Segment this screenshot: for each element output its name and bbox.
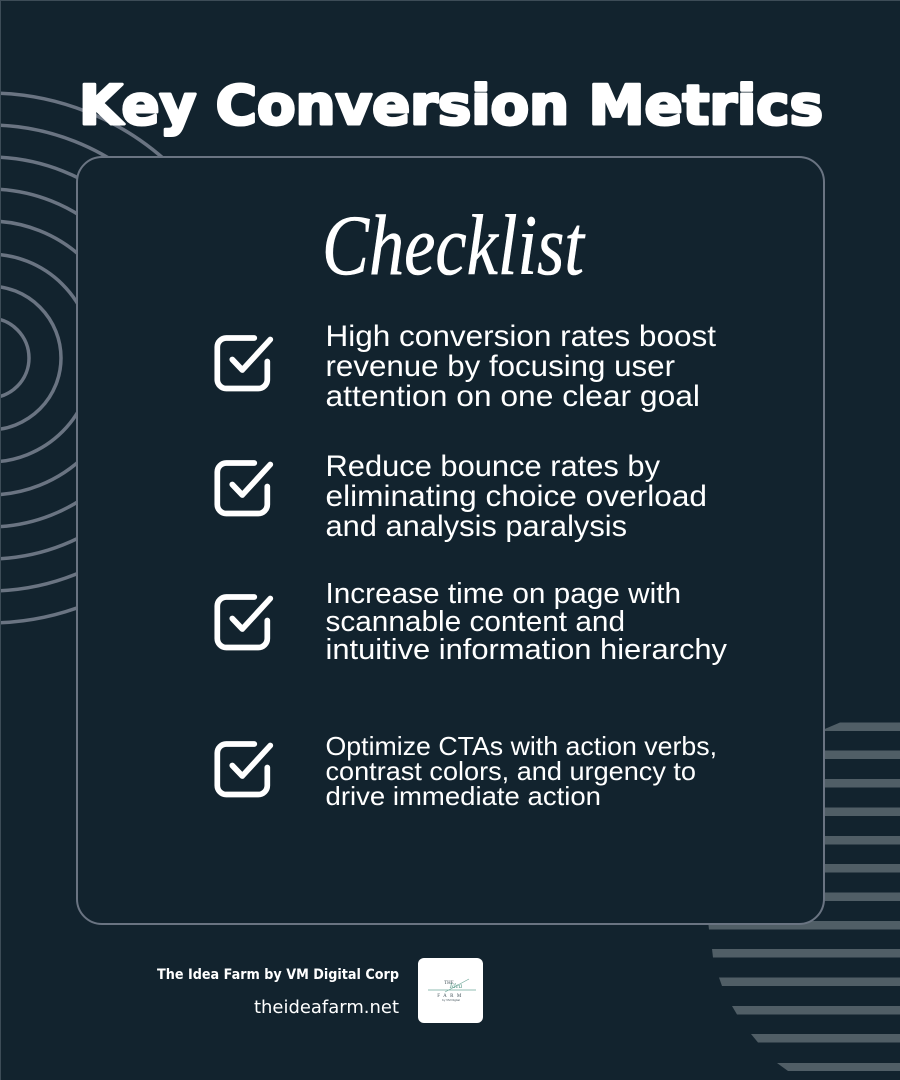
panel heading: Checklist (322, 197, 586, 293)
logo word: farm: FARM (437, 994, 465, 999)
text: time on page: Increase time on page with (326, 578, 681, 610)
footer website: theideafarm.net (254, 997, 399, 1018)
text: CTAs: contrast colors, and urgency to (326, 756, 696, 786)
text: bounce rates (326, 450, 707, 543)
text: time on page: scannable content and (326, 606, 625, 638)
panel: checklist (77, 157, 824, 924)
text: bounce rates: eliminating choice overload (326, 480, 707, 513)
checklist item 2 (217, 450, 707, 543)
logo (418, 958, 483, 1023)
text: conversion rates: attention on one clear goal (326, 380, 700, 413)
checklist item 1 (217, 320, 717, 413)
logo word: by line: by VM Digital (442, 998, 460, 1002)
icon: checkbox (217, 463, 270, 514)
text: conversion rates: revenue by focusing user (326, 350, 675, 383)
decorative concentric rings (0, 93, 254, 623)
panel background (77, 157, 824, 924)
text: bounce rates: Reduce bounce rates by (326, 450, 660, 483)
text: CTAs: drive immediate action (326, 781, 601, 811)
text: conversion rates: High conversion rates boost (326, 320, 717, 353)
checklist item 4 (217, 731, 717, 811)
text: CTAs: Optimize CTAs with action verbs, (326, 731, 717, 761)
icon: checkbox (217, 744, 270, 794)
logo word: the: THE (444, 981, 454, 986)
logo tile (418, 958, 483, 1023)
text: bounce rates: and analysis paralysis (326, 510, 627, 543)
logo line (428, 979, 476, 992)
checklist item 3 (217, 578, 728, 666)
text: time on page (326, 578, 728, 666)
logo word: idea: Idea (449, 982, 463, 990)
text: CTAs (326, 731, 717, 811)
main title: Key Conversion Metrics (79, 74, 823, 137)
text: conversion rates (326, 320, 717, 413)
icon: checkbox (217, 338, 270, 388)
footer company name: The Idea Farm by VM Digital Corp (157, 967, 399, 983)
icon: checkbox (217, 597, 270, 648)
text: time on page: intuitive information hierarchy (326, 634, 728, 666)
decorative striped half circle (708, 722, 900, 1071)
